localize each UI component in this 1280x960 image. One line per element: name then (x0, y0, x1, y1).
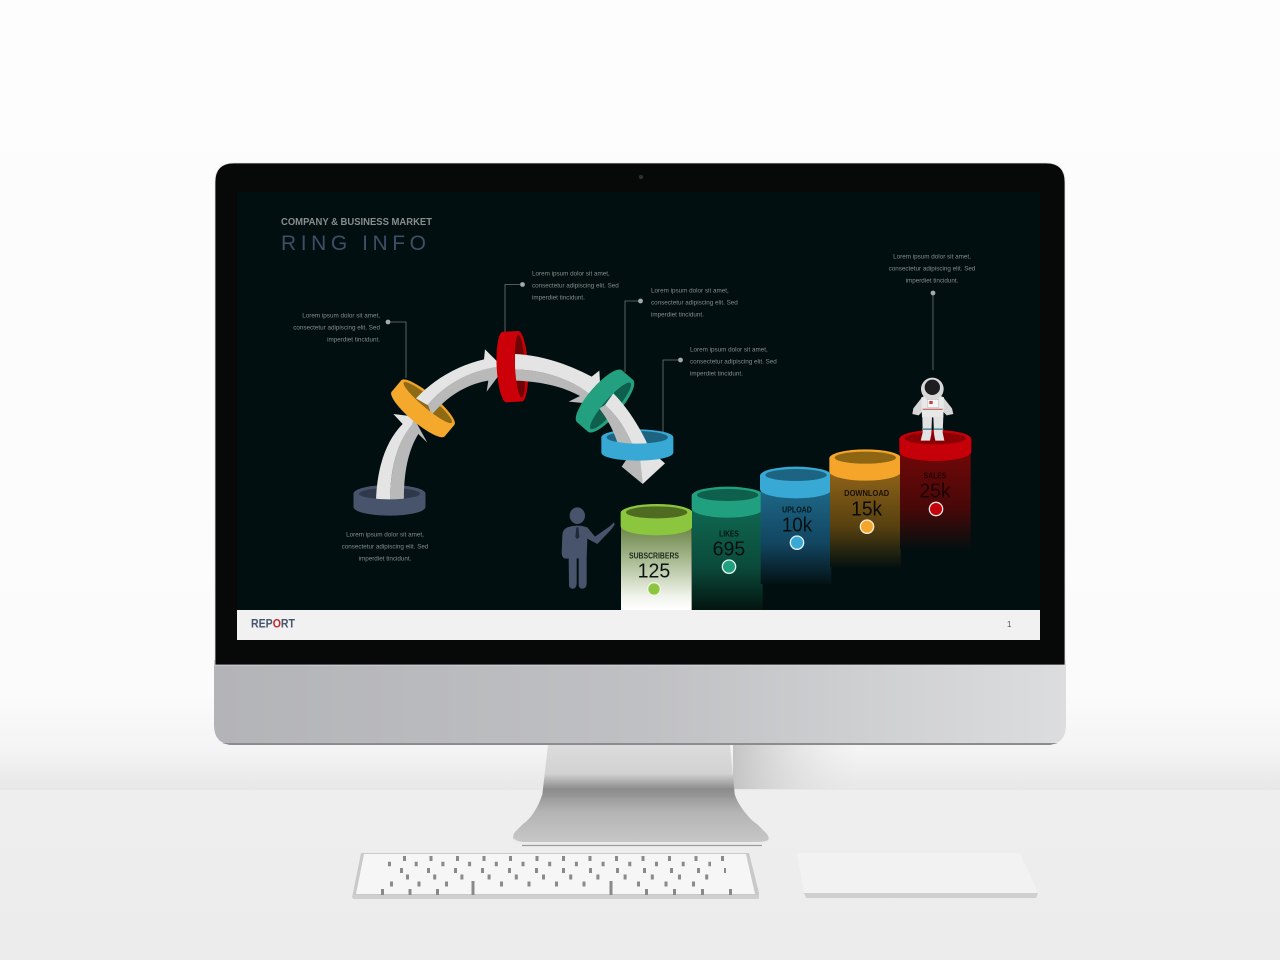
keyboard (352, 853, 759, 899)
text block: astronaut: imperdiet tincidunt. (906, 278, 959, 284)
cylinder: likes: 695 (713, 538, 745, 560)
trackpad (797, 853, 1038, 898)
footer bar (237, 610, 1040, 640)
callout dots (386, 282, 935, 362)
title: COMPANY & BUSINESS MARKET (281, 217, 432, 228)
cylinder: subscribers: 125 (638, 561, 670, 583)
text block: base ring: Lorem ipsum dolor sit amet, (346, 532, 424, 538)
cylinder: upload: 10k (782, 514, 813, 536)
ring: blue (601, 437, 673, 461)
desk surface (0, 790, 1280, 960)
text block: green ring: Lorem ipsum dolor sit amet, (651, 288, 729, 294)
callout lines (388, 284, 933, 432)
arrow head (622, 457, 643, 484)
cylinder: sales: SALES (924, 472, 947, 481)
cylinder: sales (899, 430, 971, 549)
cylinder: download (829, 449, 901, 567)
camera (639, 175, 643, 179)
text block: astronaut (889, 254, 976, 284)
arrow segments (376, 349, 665, 502)
text block: green ring (651, 288, 738, 318)
cylinder: download: 15k (851, 498, 883, 520)
ring back parts (353, 331, 673, 502)
text block: blue ring (690, 346, 777, 378)
ring: green (569, 364, 633, 432)
monitor stand (513, 745, 863, 846)
text block: left: consectetur adipiscing elit. Sed (293, 324, 380, 332)
text block: blue ring: consectetur adipiscing elit. Sed (690, 358, 777, 366)
text block: left: imperdiet tincidunt. (327, 336, 380, 344)
screen (237, 192, 1040, 610)
ring: yellow (386, 380, 454, 443)
text block: astronaut: consectetur adipiscing elit. Sed (889, 266, 976, 272)
arrow 2 (427, 366, 498, 415)
text block: base ring: imperdiet tincidunt. (359, 556, 412, 562)
cylinder: subscribers: SUBSCRIBERS (629, 551, 680, 560)
text block: blue ring: Lorem ipsum dolor sit amet, (690, 346, 768, 354)
title (281, 217, 432, 255)
text block: red ring: imperdiet tincidunt. (532, 294, 585, 302)
cylinder: upload: UPLOAD (782, 505, 812, 514)
title: RING INFO (281, 232, 426, 255)
text block: green ring: imperdiet tincidunt. (651, 312, 704, 318)
cylinder: likes: LIKES (719, 530, 739, 539)
text block: green ring: consectetur adipiscing elit. Sed (651, 300, 738, 306)
cylinder: likes (692, 487, 764, 610)
ring: red (495, 331, 522, 403)
text block: red ring (532, 270, 619, 302)
ring front parts (353, 331, 673, 516)
cylinder: upload (760, 467, 832, 584)
cylinder: sales: 25k (919, 480, 951, 502)
cylinder: download: DOWNLOAD (844, 489, 889, 498)
ring: slate base (353, 494, 425, 516)
monitor chin (214, 660, 1066, 745)
text block: red ring: consectetur adipiscing elit. Sed (532, 282, 619, 290)
ring arrow diagram (353, 331, 673, 516)
text block: base ring: consectetur adipiscing elit. Sed (342, 544, 429, 550)
astronaut (912, 378, 953, 441)
page number: 1 (1007, 620, 1012, 629)
cylinder: subscribers (621, 504, 693, 610)
text block: base ring (342, 532, 429, 562)
text block: astronaut: Lorem ipsum dolor sit amet, (893, 254, 971, 260)
monitor (214, 163, 1066, 745)
arrow 3 (515, 369, 593, 404)
footer brand: REPORT (251, 618, 295, 631)
presenter silhouette (562, 507, 615, 589)
text block: left (293, 312, 380, 344)
text block: left: Lorem ipsum dolor sit amet, (302, 312, 380, 320)
arrow 1 (390, 418, 427, 502)
monitor bezel (215, 163, 1065, 665)
arrow 4 (599, 405, 634, 448)
text block: red ring: Lorem ipsum dolor sit amet, (532, 270, 610, 278)
text block: blue ring: imperdiet tincidunt. (690, 370, 743, 378)
